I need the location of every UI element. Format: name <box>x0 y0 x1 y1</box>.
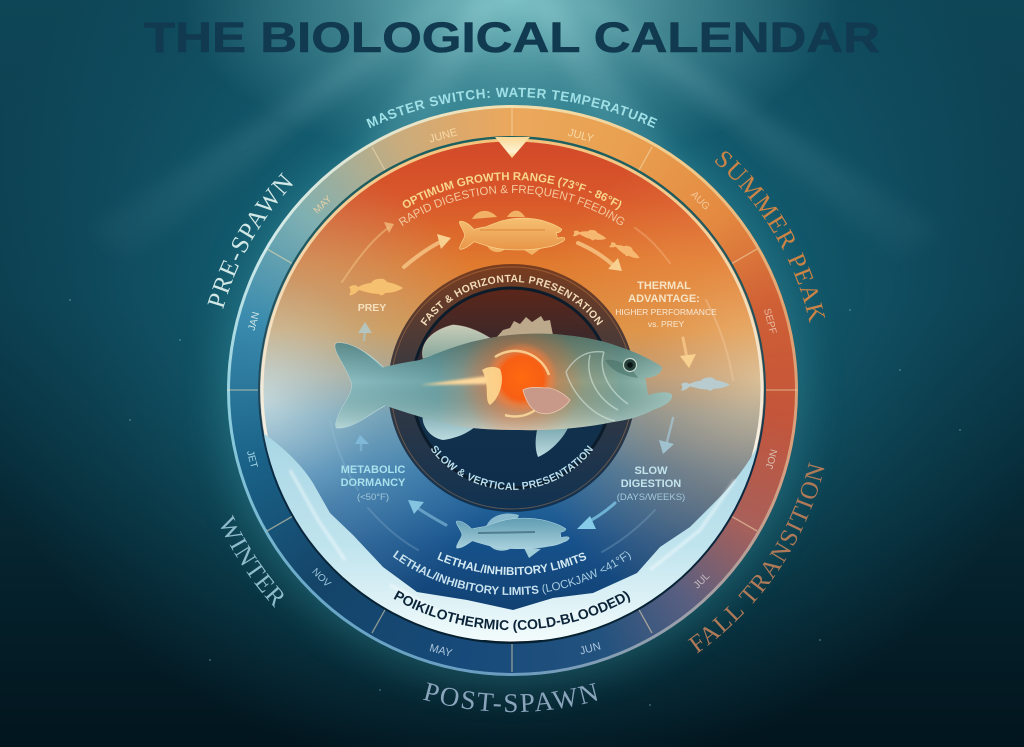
icon: prey fish pair <box>573 226 642 262</box>
text: thermal advantage: vs. PREY <box>648 319 685 329</box>
central bass <box>335 316 672 457</box>
text: fast and horizontal: FAST & HORIZONTAL PRESENTATION <box>420 274 604 326</box>
season labels: WINTER <box>220 514 284 608</box>
master switch heading: MASTER SWITCH: WATER TEMPERATURE <box>366 88 658 128</box>
text: slow digestion: (DAYS/WEEKS) <box>617 492 685 503</box>
text: metabolic dormancy: DORMANCY <box>341 477 406 489</box>
text: thermal advantage: HIGHER PERFORMANCE <box>615 307 717 317</box>
season labels: SUMMER PEAK <box>714 151 826 323</box>
text: poikilothermic: POIKILOTHERMIC (COLD-BLOODED) <box>394 590 630 633</box>
ring month labels <box>244 126 780 660</box>
text: slow digestion: DIGESTION <box>621 478 681 490</box>
icon: prey fish left <box>349 279 403 295</box>
text: slow digestion: SLOW <box>634 465 668 477</box>
diagram: calendar wheel <box>208 88 826 712</box>
ring month labels: NOV <box>309 567 333 590</box>
season labels: PRE-SPAWN <box>208 172 293 309</box>
text: thermal advantage: ADVANTAGE: <box>628 293 700 305</box>
season labels: POST-SPAWN <box>423 682 598 712</box>
temperature disc <box>258 136 766 644</box>
ring month labels: JAN <box>247 311 262 332</box>
text: metabolic dormancy <box>341 464 406 503</box>
flow arrows: cold side <box>330 322 674 552</box>
thermostat notch <box>495 137 530 158</box>
icon: large orange bass <box>459 211 565 255</box>
panel: month ring <box>230 108 795 673</box>
title: THE BIOLOGICAL CALENDAR <box>144 14 880 62</box>
ice band <box>255 432 770 640</box>
ring month labels: JULY <box>567 127 596 145</box>
text: prey label: PREY <box>358 302 386 314</box>
ring ticks <box>227 108 797 672</box>
ring month labels: JUL <box>692 571 713 591</box>
ring month labels: JON <box>765 448 780 470</box>
text: slow digestion <box>617 465 685 503</box>
season labels: FALL TRANSITION <box>688 462 824 654</box>
ring month labels: JUNE <box>428 126 459 145</box>
icon: silver prey <box>681 377 730 391</box>
ring month labels: SEPF <box>761 307 778 335</box>
text: slow and vertical: SLOW & VERTICAL PRESENTATION <box>431 445 594 490</box>
text: metabolic dormancy: METABOLIC <box>341 464 405 476</box>
inner dark circle <box>388 264 636 512</box>
text: lethal limits one: LETHAL/INHIBITORY LIMITS <box>437 552 586 575</box>
ring month labels: JET <box>244 449 259 469</box>
icon: cold bass <box>456 514 569 558</box>
season labels <box>208 151 826 712</box>
ring month labels: MAY <box>428 642 454 660</box>
text: thermal advantage <box>615 280 717 329</box>
ring month labels: AUG <box>688 190 712 213</box>
panel: month ring rim <box>227 105 798 676</box>
text: metabolic dormancy: (<50°F) <box>357 492 389 503</box>
text: rapid digestion: RAPID DIGESTION & FREQUENT FEEDING <box>398 185 624 226</box>
text: lethal limits two: LETHAL/INHIBITORY LIMITS (LOCKJAW <41°F) <box>392 550 631 595</box>
ring month labels: MAY <box>312 194 335 216</box>
text: optimum growth range: OPTIMUM GROWTH RANGE (73°F - 86°F) <box>402 172 622 210</box>
flow arrows: warm side <box>342 222 733 380</box>
ring month labels: JUN <box>578 640 602 658</box>
text: thermal advantage: THERMAL <box>637 280 691 292</box>
